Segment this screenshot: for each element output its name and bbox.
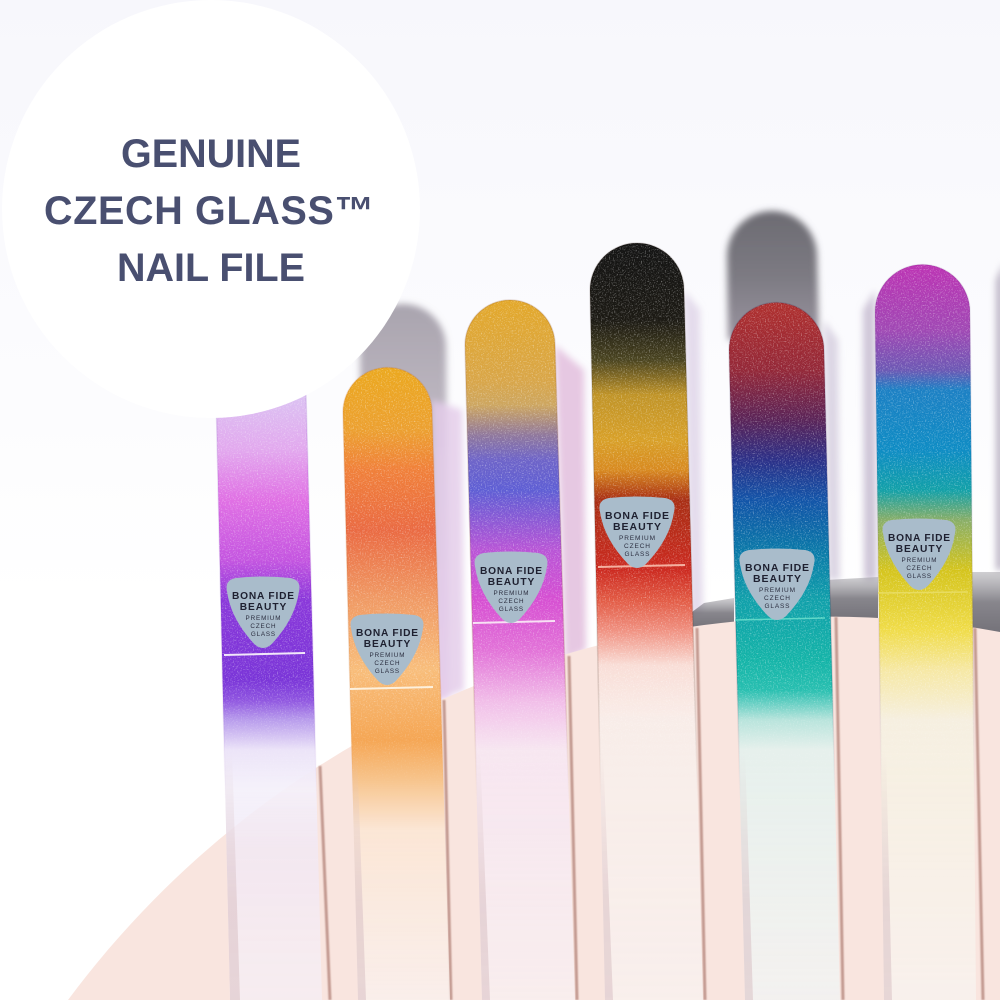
label: black gold red file: GLASS bbox=[624, 551, 650, 558]
label: purple file bbox=[227, 576, 299, 648]
label: purple file: BONA FIDE bbox=[232, 591, 294, 602]
label: gold violet file: BEAUTY bbox=[488, 577, 534, 588]
shadow band above pink disc bbox=[692, 572, 1000, 632]
label: gold violet file: CZECH bbox=[498, 598, 524, 605]
label: magenta blue yellow file: GLASS bbox=[907, 573, 931, 580]
label: purple file: CZECH bbox=[250, 623, 276, 630]
label: red blue teal file: BEAUTY bbox=[753, 573, 801, 585]
label: orange file: GLASS bbox=[375, 668, 399, 675]
label: magenta blue yellow file: PREMIUM bbox=[902, 557, 936, 564]
title circle: GENUINE bbox=[121, 132, 301, 176]
label: black gold red file: CZECH bbox=[624, 543, 650, 550]
title circle: NAIL FILE bbox=[117, 246, 305, 290]
label: black gold red file bbox=[599, 496, 675, 568]
glitter texture bbox=[216, 243, 974, 778]
label: purple file: PREMIUM bbox=[246, 615, 280, 622]
label: black gold red file: BONA FIDE bbox=[605, 510, 669, 522]
nail file: purple bbox=[216, 395, 322, 1000]
label: orange file: BONA FIDE bbox=[356, 628, 418, 639]
nail file: black gold red bbox=[590, 243, 703, 1000]
nail file: red blue teal bbox=[729, 303, 840, 1000]
soft glass edges on lower files bbox=[226, 789, 892, 1000]
label: orange file: BEAUTY bbox=[364, 639, 410, 650]
label: black gold red file: BEAUTY bbox=[613, 521, 661, 533]
nail file: orange bbox=[343, 368, 450, 1000]
nail file: gold violet bbox=[465, 300, 575, 1000]
file shadows on background bbox=[360, 211, 1000, 700]
label: orange file bbox=[351, 614, 423, 685]
label: gold violet file bbox=[475, 552, 547, 623]
label: black gold red file: PREMIUM bbox=[619, 535, 655, 542]
label: red blue teal file: GLASS bbox=[764, 603, 790, 610]
label: orange file: PREMIUM bbox=[370, 652, 404, 659]
label: gold violet file: GLASS bbox=[499, 606, 523, 613]
label: magenta blue yellow file: CZECH bbox=[906, 565, 932, 572]
label: gold violet file: PREMIUM bbox=[494, 590, 528, 597]
nail file: magenta blue yellow bbox=[875, 264, 976, 1000]
label: purple file: GLASS bbox=[251, 631, 275, 638]
label: magenta blue yellow file: BONA FIDE bbox=[888, 533, 950, 544]
label: gold violet file: BONA FIDE bbox=[480, 566, 542, 577]
file notch lines bbox=[224, 565, 968, 689]
label: magenta blue yellow file bbox=[883, 518, 955, 590]
title circle: CZECH GLASS™ bbox=[44, 189, 374, 233]
label: red blue teal file: BONA FIDE bbox=[745, 562, 809, 574]
label: red blue teal file: PREMIUM bbox=[759, 587, 795, 594]
label: purple file: BEAUTY bbox=[240, 602, 286, 613]
label: red blue teal file: CZECH bbox=[764, 595, 790, 602]
label: orange file: CZECH bbox=[374, 660, 400, 667]
label: red blue teal file bbox=[739, 548, 815, 620]
label: magenta blue yellow file: BEAUTY bbox=[896, 544, 942, 555]
title circle bbox=[2, 0, 420, 418]
pink ridged disc bbox=[68, 617, 1000, 1000]
